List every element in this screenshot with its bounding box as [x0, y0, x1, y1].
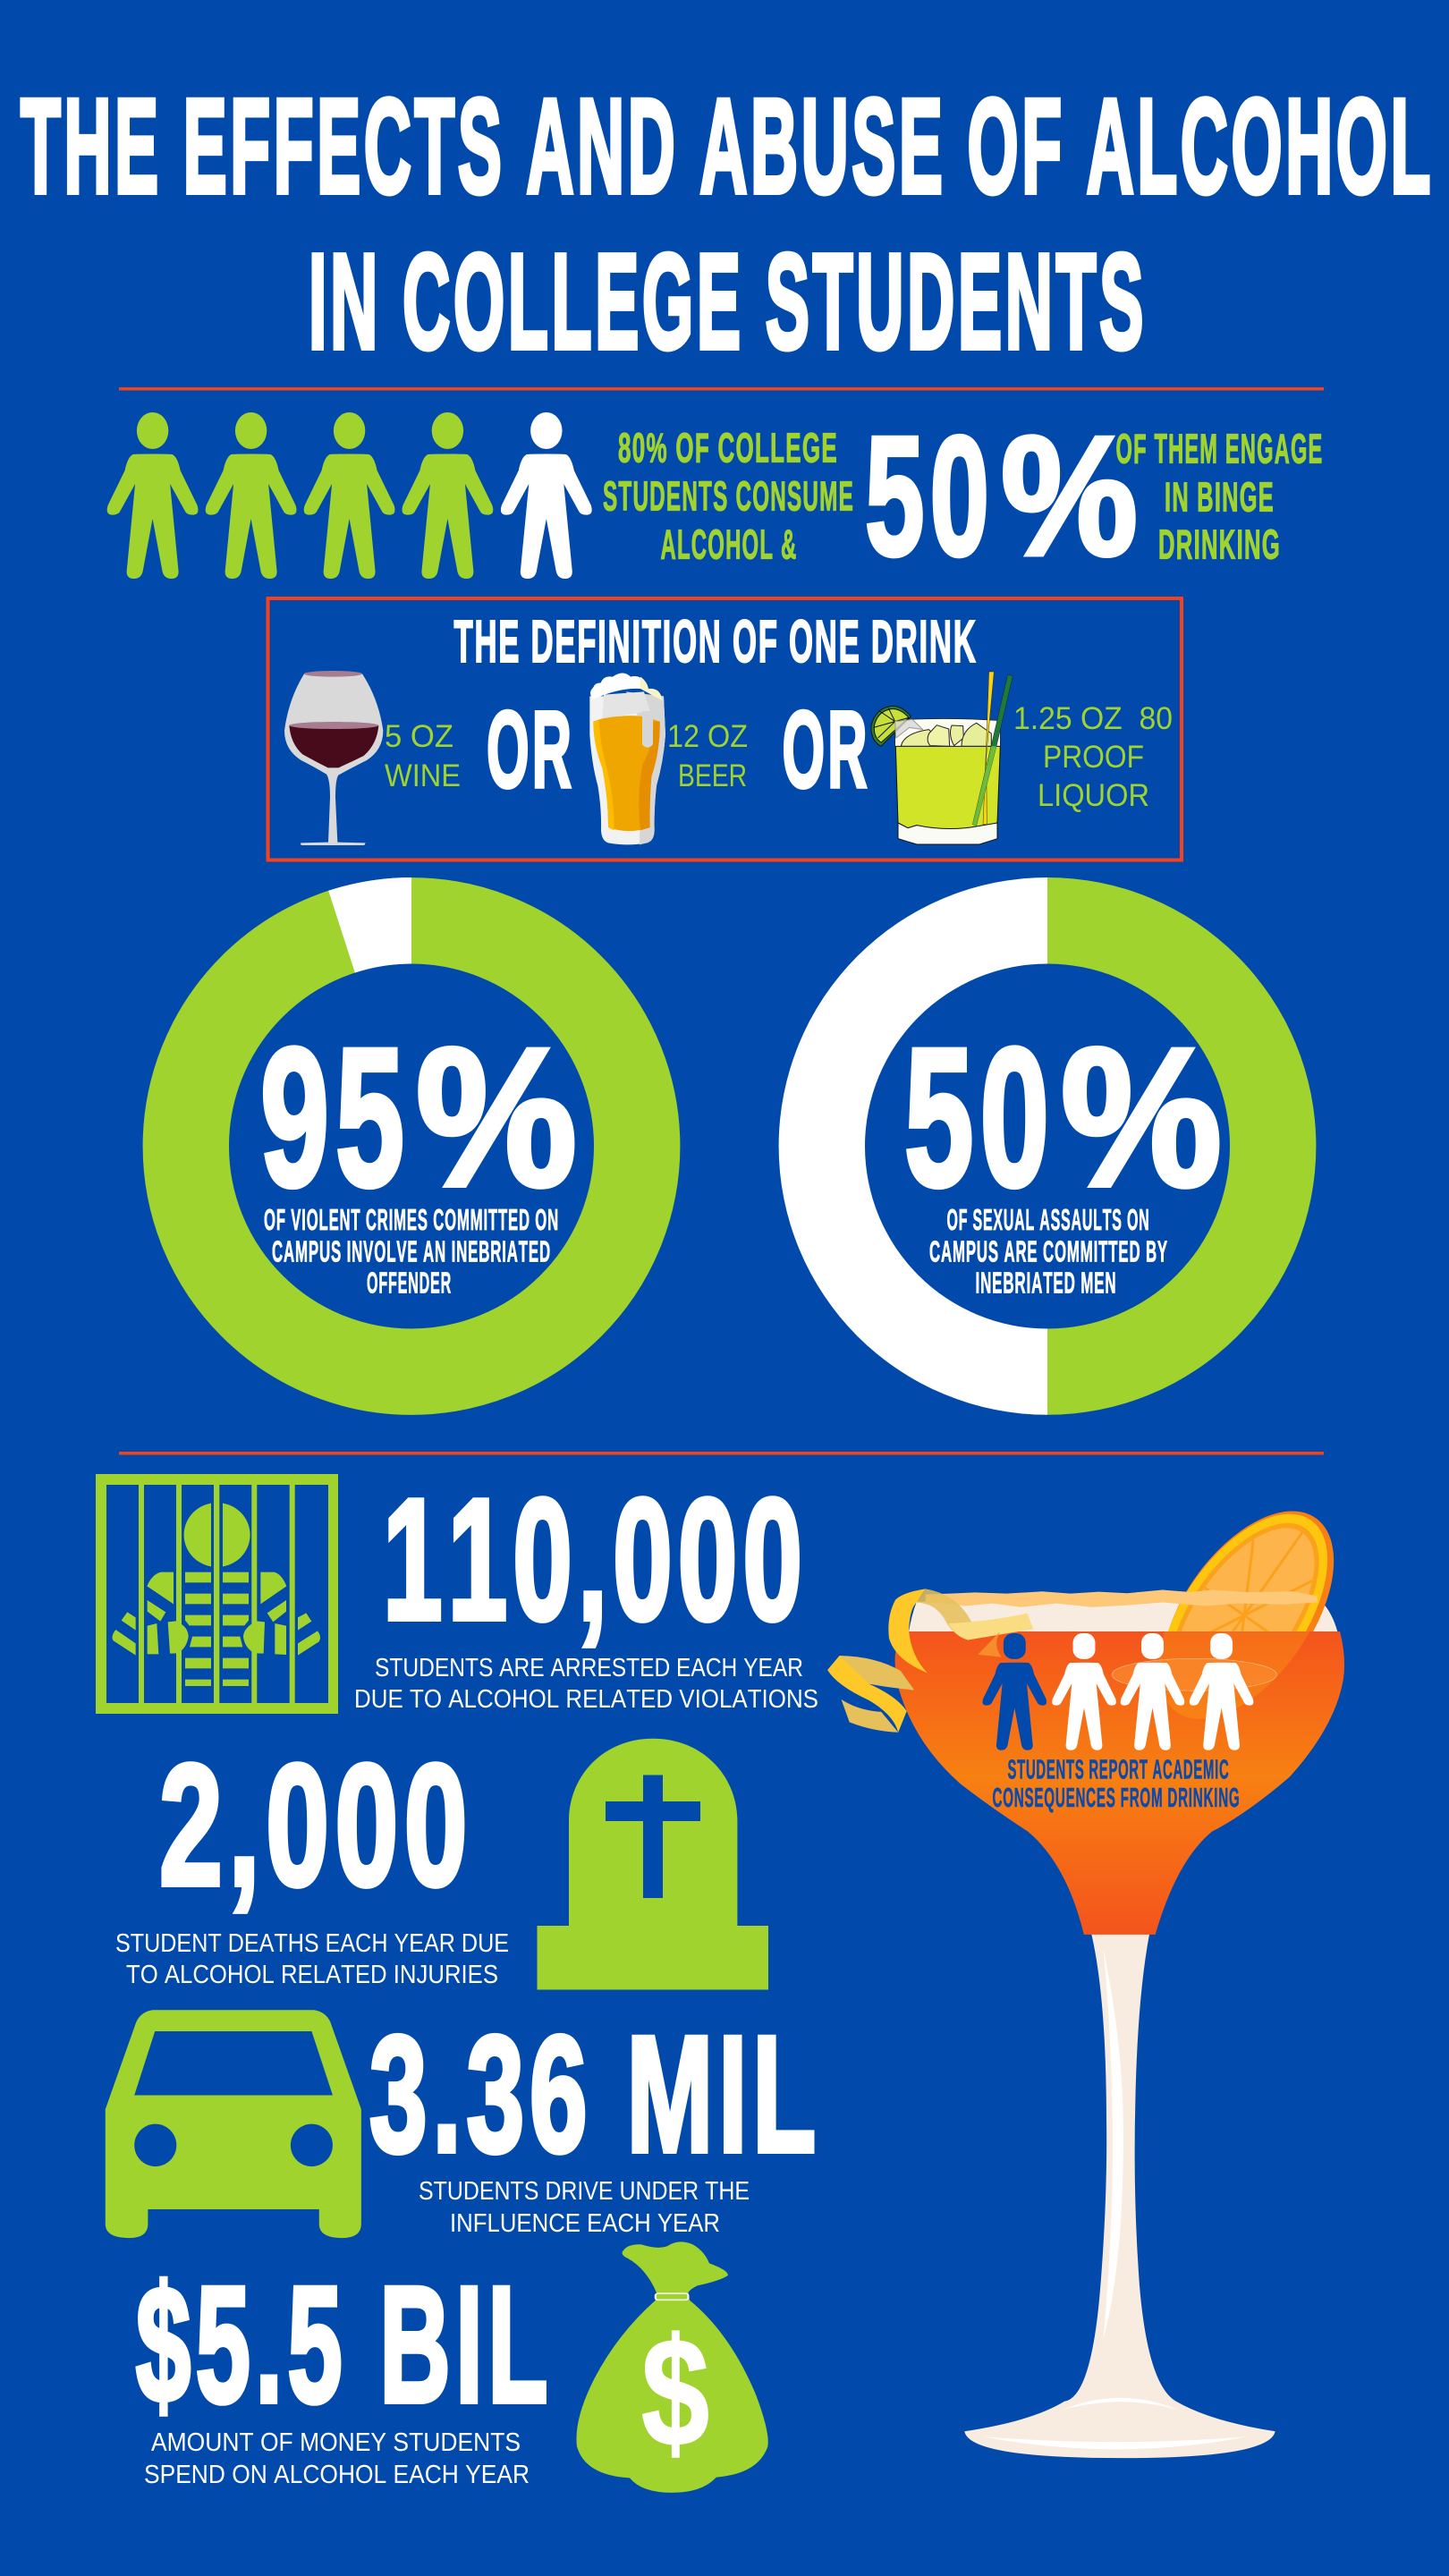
caption: driving under the influence: INFLUENCE EACH YEAR: [450, 2209, 720, 2238]
label: 1.25 oz 80 proof liquor: PROOF: [1043, 740, 1144, 775]
glass bowl: [895, 1602, 1344, 1935]
caption: money spent: SPEND ON ALCOHOL EACH YEAR: [144, 2461, 530, 2489]
stat: 95%: 95: [260, 1007, 411, 1227]
label: 5 oz wine: [385, 719, 461, 793]
heading: the definition of one drink: THE DEFINITION OF ONE DRINK: [454, 608, 977, 675]
icon row: five people, four green and one white: [107, 412, 592, 579]
stat: 2,000: 2,000: [159, 1728, 473, 1921]
icon: prisoner behind bars: [96, 1474, 338, 1714]
stat: 95%: %: [416, 1007, 577, 1227]
text: of them engage in binge drinking: DRINKING: [1158, 521, 1281, 567]
label: 12 oz beer: [667, 719, 748, 793]
label: 5 oz wine: 5 OZ: [385, 719, 453, 754]
label: 12 oz beer: BEER: [678, 758, 747, 793]
label: 5 oz wine: WINE: [385, 758, 461, 793]
half ring: white: [779, 877, 1047, 1415]
label: 1.25 oz 80 proof liquor: LIQUOR: [1038, 778, 1149, 813]
stat: 50%: %: [1061, 1007, 1222, 1227]
big number: 50%: %: [1001, 402, 1138, 591]
caption: violent crimes: CAMPUS INVOLVE AN INEBRIATED: [272, 1234, 551, 1268]
icon: cocktail with lime and straws: [871, 672, 1013, 844]
caption: students arrested: [354, 1654, 818, 1714]
caption: driving under the influence: [419, 2177, 750, 2238]
orange slice garnish: [1111, 1512, 1335, 1719]
illustration: cocktail glass with academic consequences stat: [827, 1481, 1368, 2458]
caption: sexual assaults: CAMPUS ARE COMMITTED BY: [929, 1234, 1168, 1268]
wedge: remaining 5%: [328, 877, 411, 973]
caption: sexual assaults: INEBRIATED MEN: [975, 1267, 1116, 1299]
icon: money bag: [576, 2241, 768, 2493]
caption: violent crimes: [264, 1203, 559, 1299]
icon: wine glass: [284, 671, 383, 845]
icon: beer glass: [589, 673, 665, 844]
caption: driving under the influence: STUDENTS DRIVE UNDER THE: [419, 2177, 750, 2206]
label: 1.25 oz 80 proof liquor: 1.25 OZ 80: [1013, 701, 1173, 736]
word: or: OR: [782, 689, 869, 810]
word: or: OR: [487, 689, 574, 810]
caption: sexual assaults: OF SEXUAL ASSAULTS ON: [946, 1203, 1150, 1236]
text: 80% of college students consume alcohol: ALCOHOL &: [660, 521, 798, 567]
caption: money spent: AMOUNT OF MONEY STUDENTS: [151, 2428, 521, 2457]
icon: money bag: $: [641, 2307, 709, 2479]
glass stem and foot: [964, 1934, 1275, 2458]
caption: students arrested: STUDENTS ARE ARRESTED EACH YEAR: [375, 1654, 803, 1682]
label: 1.25 oz 80 proof liquor: [1013, 701, 1173, 813]
caption: money spent: [144, 2428, 530, 2489]
stat: 3.36 MIL: 3.36 MIL: [369, 2003, 821, 2187]
label: 12 oz beer: 12 OZ: [667, 719, 748, 754]
donut chart: 95%: [186, 877, 637, 1372]
caption: violent crimes: OF VIOLENT CRIMES COMMITTED ON: [264, 1203, 559, 1236]
people icons: one blue, three white: [983, 1633, 1253, 1750]
stat: $5.5 BIL: $5.5 BIL: [136, 2253, 553, 2437]
caption: students report academic consequences: [993, 1755, 1240, 1813]
title: [21, 71, 1434, 377]
icon: tombstone with cross: [537, 1739, 768, 1989]
caption: violent crimes: OFFENDER: [367, 1267, 452, 1299]
donut chart: 50%: [779, 877, 1316, 1415]
text: 80% of college students consume alcohol: [603, 424, 854, 567]
caption: student deaths: [115, 1929, 509, 1989]
caption: student deaths: TO ALCOHOL RELATED INJURIES: [126, 1961, 498, 1989]
caption: student deaths: STUDENT DEATHS EACH YEAR DUE: [115, 1929, 509, 1958]
big number: 50%: 50: [865, 402, 995, 591]
stat: 50%: 50: [904, 1007, 1055, 1227]
text: of them engage in binge drinking: [1116, 426, 1324, 567]
salted rim and lemon peel twist: [827, 1589, 1318, 1733]
text: 80% of college students consume alcohol: STUDENTS CONSUME: [603, 472, 854, 519]
text: 80% of college students consume alcohol: 80% OF COLLEGE: [618, 424, 838, 470]
caption: students arrested: DUE TO ALCOHOL RELATED VIOLATIONS: [354, 1685, 818, 1714]
caption: sexual assaults: [929, 1203, 1168, 1299]
text: of them engage in binge drinking: IN BINGE: [1165, 474, 1275, 521]
panel: definition of one drink: [268, 598, 1182, 860]
stat: 110,000: 110,000: [383, 1462, 808, 1656]
icon: car front: [106, 2010, 361, 2238]
